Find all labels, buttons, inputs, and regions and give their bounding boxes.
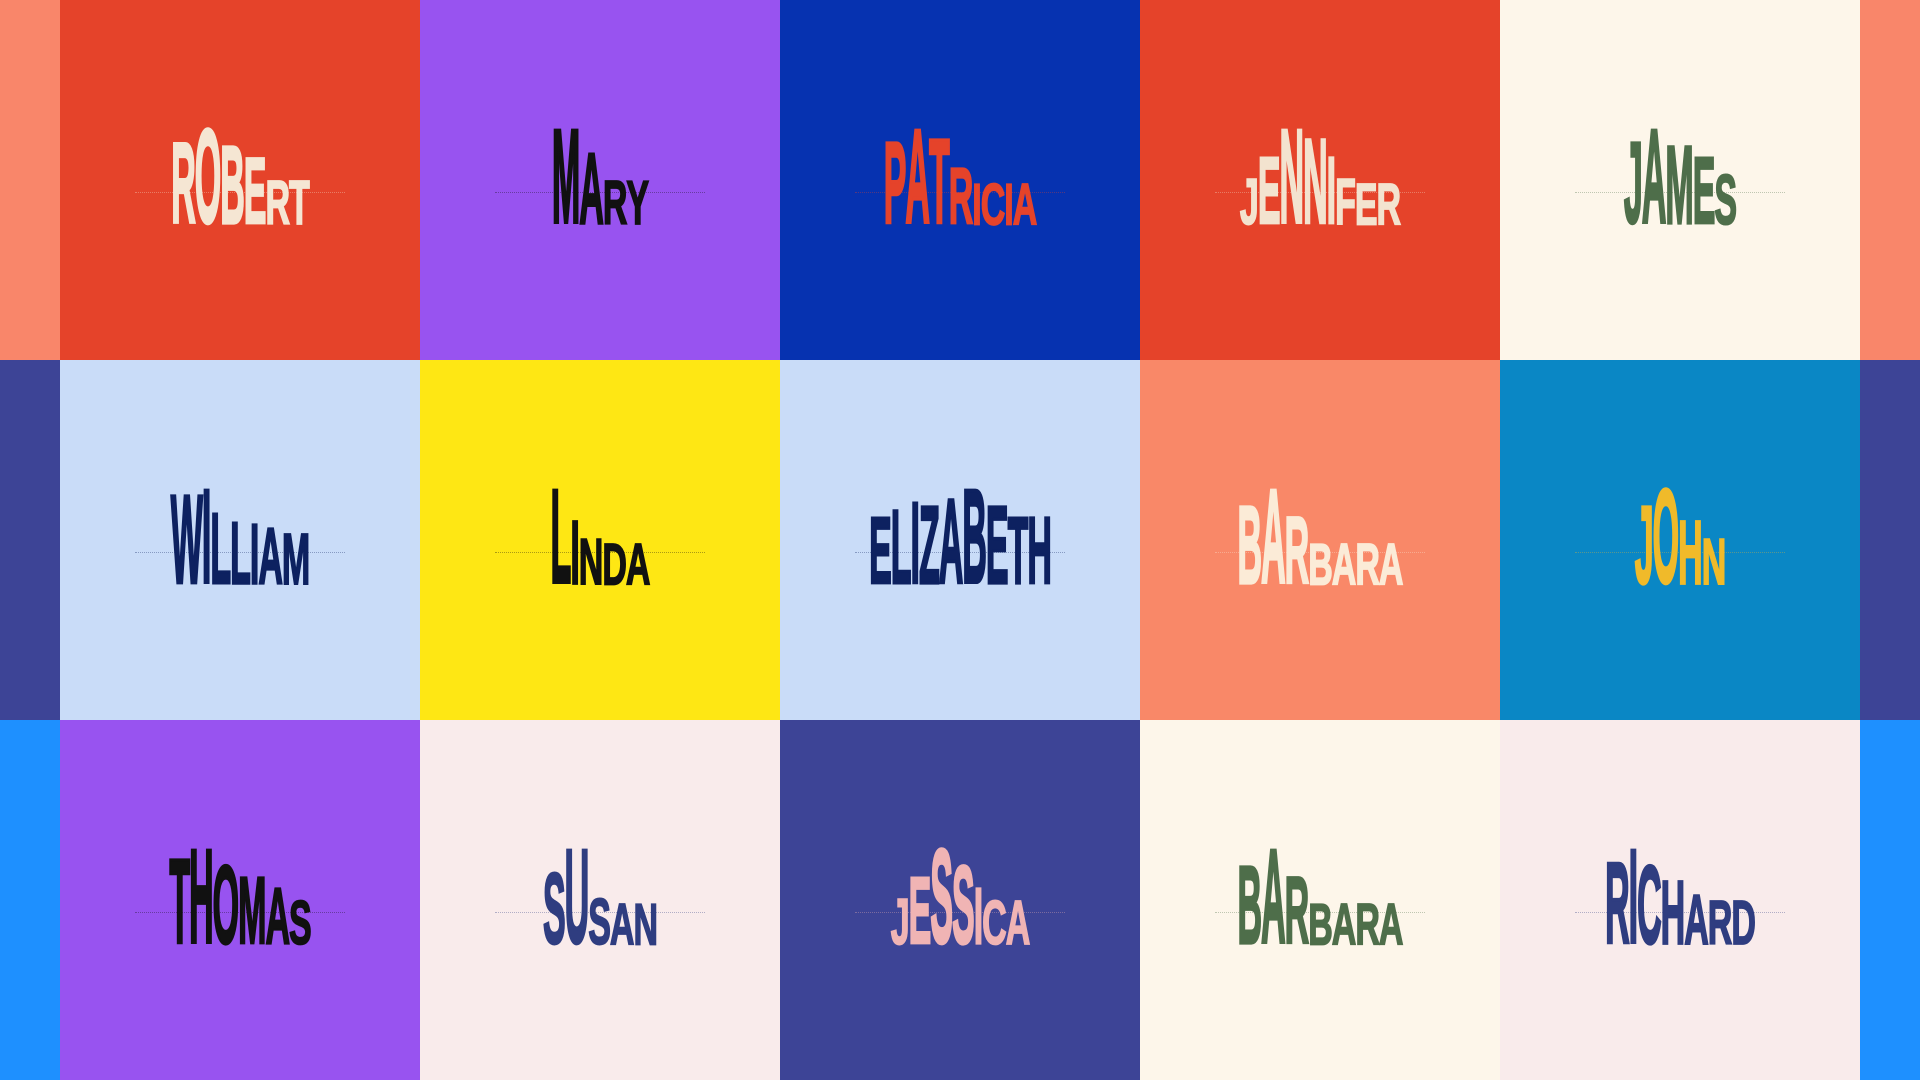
tile: Barbara: A [1261, 465, 1285, 613]
tile: James: A [1642, 105, 1665, 253]
tile: James: M [1665, 126, 1693, 249]
tile: Linda: N [579, 527, 602, 599]
tile: Robert: B [220, 126, 244, 249]
tile: Jennifer [1140, 0, 1500, 360]
tile: Thomas: H [189, 825, 213, 973]
tile: Patricia: C [981, 173, 1004, 238]
tile: Linda [420, 360, 780, 720]
tile: Barbara: A [1379, 533, 1402, 598]
tile: Thomas: A [265, 873, 289, 962]
tile: Richard: R [1605, 841, 1629, 970]
tile: Jessica [780, 720, 1140, 1080]
tile: Patricia: R [949, 153, 972, 242]
tile: Barbara: B [1238, 486, 1261, 609]
tile: Mary: M [552, 105, 579, 253]
tile: William: I [250, 508, 258, 604]
tile: Richard: H [1661, 864, 1684, 965]
tile: Richard: C [1637, 846, 1661, 969]
tile: Jessica: E [909, 860, 930, 966]
tile: Elizabeth: E [869, 500, 891, 606]
tile: Jennifer: F [1335, 167, 1355, 239]
tile: James: S [1714, 162, 1736, 240]
tile: William: I [202, 465, 210, 613]
tile: Richard: R [1708, 890, 1731, 959]
tile: Patricia: I [1004, 173, 1013, 238]
tile: Jessica: C [982, 890, 1006, 959]
tile: Linda: D [602, 533, 626, 598]
tile: Linda: A [626, 533, 649, 598]
tile: Barbara green: A [1261, 825, 1285, 973]
tile: William: A [258, 513, 282, 602]
tile: Jennifer: N [1280, 105, 1303, 253]
tile: Jessica: S [930, 825, 952, 973]
tile: Patricia: A [905, 105, 929, 253]
tile: Richard: I [1629, 825, 1637, 973]
tile: John: J [1635, 486, 1653, 609]
tile: Richard: A [1684, 882, 1708, 960]
tile: Patricia: T [929, 117, 949, 251]
tile: Elizabeth: Z [919, 486, 939, 609]
tile: John [1500, 360, 1860, 720]
tile: Elizabeth [780, 360, 1140, 720]
tile: Barbara green: B [1238, 846, 1261, 969]
tile: William [60, 360, 420, 720]
tile: William: W [171, 472, 202, 612]
tile: John: H [1678, 504, 1702, 605]
tile: Mary: Y [626, 170, 648, 239]
tile: Robert: O [195, 105, 220, 253]
tile: Susan: S [588, 887, 610, 959]
tile: Barbara green [1140, 720, 1500, 1080]
tile: James: J [1624, 121, 1642, 250]
tile: Susan: S [543, 855, 565, 967]
tile: Mary: A [579, 135, 603, 247]
tile: Thomas: S [289, 890, 311, 959]
tile: Patricia: P [884, 121, 905, 250]
tile: Susan: N [633, 893, 657, 958]
tile: Jennifer: N [1303, 117, 1327, 251]
tile: Barbara green: B [1308, 893, 1332, 958]
tile: Jennifer: I [1327, 140, 1335, 246]
tile: Elizabeth: I [911, 481, 919, 610]
tile: Barbara green: A [1379, 893, 1402, 958]
tile: Thomas: M [238, 860, 265, 966]
tile: John: N [1702, 527, 1725, 599]
tile: Jennifer: J [1240, 167, 1258, 239]
tile: Patricia: I [972, 173, 981, 238]
tile: Robert: R [171, 122, 195, 249]
tile: James [1500, 0, 1860, 360]
tile: Elizabeth: L [891, 490, 911, 608]
tile: Linda: L [551, 465, 570, 613]
tile: Mary [420, 0, 780, 360]
tile: Jennifer: E [1355, 173, 1377, 238]
tile: Elizabeth: E [986, 486, 1008, 609]
tile: Mary: R [603, 170, 626, 239]
tile: Elizabeth: H [1027, 500, 1051, 606]
tile: Robert [60, 0, 420, 360]
tile: Thomas: O [213, 846, 238, 969]
tile: Patricia: A [1013, 173, 1036, 238]
tile: Barbara green: A [1332, 893, 1355, 958]
tile: Barbara green: R [1355, 893, 1379, 958]
tile: John: O [1653, 465, 1678, 613]
tile: Jessica: S [952, 846, 974, 969]
tile: Barbara [1140, 360, 1500, 720]
tile: Robert: T [289, 170, 309, 239]
tile: Thomas [60, 720, 420, 1080]
tile: Jennifer: R [1377, 173, 1400, 238]
tile: Elizabeth: B [962, 465, 986, 613]
tile: Jessica: A [1006, 890, 1029, 959]
tile: Elizabeth: T [1008, 500, 1027, 606]
tile: Jessica: I [974, 873, 982, 962]
tile: Linda: I [570, 504, 579, 605]
tile: Barbara: A [1332, 533, 1355, 598]
tile: Barbara green: R [1285, 860, 1308, 966]
tile: Jennifer: E [1258, 140, 1280, 246]
tile: Susan [420, 720, 780, 1080]
tile: Elizabeth: A [939, 477, 962, 611]
tile: Susan: A [610, 893, 633, 958]
tile: Barbara: B [1308, 533, 1332, 598]
tile: Susan: U [565, 825, 588, 973]
tile: Barbara: R [1285, 500, 1308, 606]
tile: Robert: E [244, 140, 265, 245]
tile: William: L [210, 495, 230, 607]
tile: Patricia [780, 0, 1140, 360]
tile: Richard [1500, 720, 1860, 1080]
tile: Barbara: R [1355, 533, 1379, 598]
tile: Thomas: T [169, 837, 189, 971]
tile: Jessica: J [891, 887, 909, 959]
tile: William: M [282, 520, 309, 601]
tile: Richard: D [1731, 890, 1755, 959]
tile: James: E [1693, 140, 1714, 246]
tile: William: L [230, 506, 250, 604]
tile: Robert: R [265, 170, 289, 239]
